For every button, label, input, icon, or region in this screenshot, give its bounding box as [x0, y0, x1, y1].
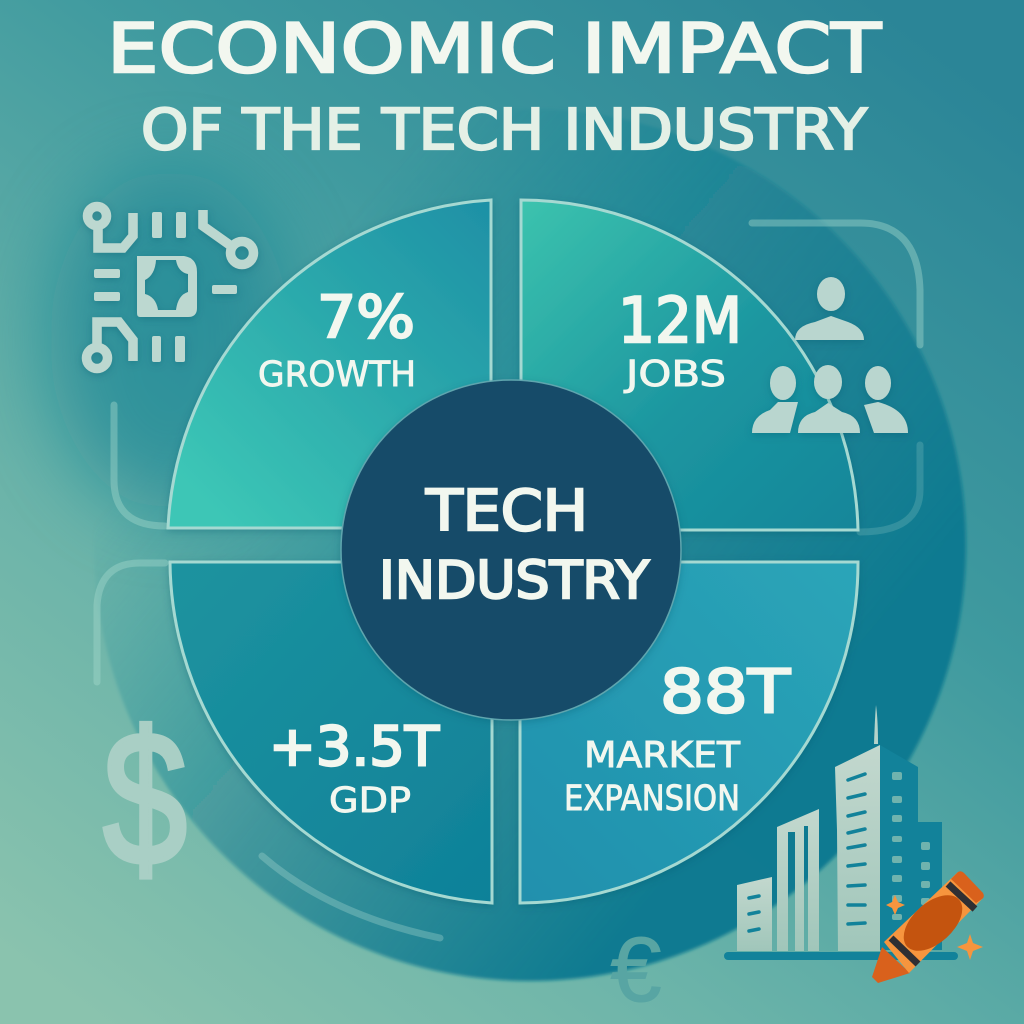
growth value: 7%	[317, 283, 415, 351]
hub label: TECH	[425, 479, 588, 544]
center hub	[341, 380, 681, 720]
jobs label: JOBS	[624, 354, 726, 395]
chip glow	[50, 170, 290, 510]
panel: market quadrant	[520, 562, 858, 903]
icon: city buildings	[724, 705, 958, 960]
market label: EXPANSION	[564, 779, 740, 819]
jobs value: 12M	[618, 284, 742, 357]
icon: euro: €	[610, 919, 662, 1021]
icon: people	[752, 277, 908, 433]
center hub: INDUSTRY	[379, 551, 649, 611]
title: OF THE TECH INDUSTRY	[141, 98, 868, 163]
icon: circuit chip	[86, 206, 254, 368]
growth label: GROWTH	[258, 355, 416, 395]
icon: dollar: $	[103, 693, 187, 905]
background halo disc	[94, 109, 966, 981]
gdp value: +3.5T	[269, 715, 440, 778]
market label: MARKET	[584, 735, 741, 776]
panel: jobs quadrant	[521, 200, 858, 530]
decorative arc connectors	[97, 223, 920, 938]
icon: crayon	[872, 871, 984, 983]
gdp label: GDP	[329, 781, 411, 821]
title	[107, 10, 882, 163]
panel: gdp quadrant	[170, 562, 492, 903]
market label	[564, 735, 741, 819]
panel: growth quadrant	[168, 200, 491, 528]
market value: 88T	[660, 657, 790, 727]
title: ECONOMIC IMPACT	[107, 10, 882, 89]
icon: sparkles	[886, 895, 905, 915]
